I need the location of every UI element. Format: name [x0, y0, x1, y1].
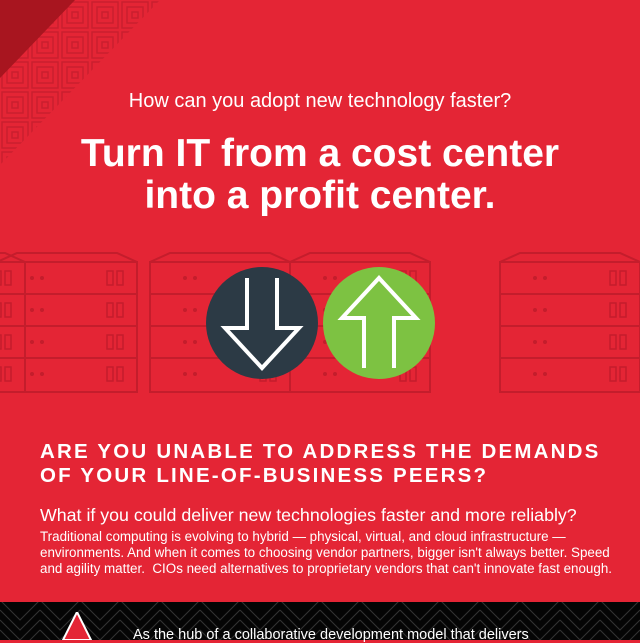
- title: into a profit center.: [144, 174, 496, 217]
- body text: [40, 529, 612, 576]
- body text: environments. And when it comes to choosing vendor partners, bigger isn't always better. Speed: [40, 545, 610, 560]
- title: [81, 132, 559, 217]
- icon: down arrow circle: [206, 267, 318, 379]
- subheading: What if you could deliver new technologies faster and more reliably?: [40, 505, 577, 525]
- section heading: ARE YOU UNABLE TO ADDRESS THE DEMANDS: [40, 440, 601, 463]
- body text: and agility matter. CIOs need alternatives to proprietary vendors that can't innovate fast enough.: [40, 561, 612, 576]
- intro question: How can you adopt new technology faster?: [129, 90, 511, 112]
- icon: logo triangle: [62, 612, 92, 640]
- footer text: As the hub of a collaborative development model that delivers: [133, 627, 529, 643]
- section heading: [40, 440, 601, 487]
- body text: Traditional computing is evolving to hybrid — physical, virtual, and cloud infrastructure —: [40, 529, 566, 544]
- section heading: OF YOUR LINE-OF-BUSINESS PEERS?: [40, 464, 488, 487]
- title: Turn IT from a cost center: [81, 132, 559, 175]
- icon: up arrow circle: [323, 267, 435, 379]
